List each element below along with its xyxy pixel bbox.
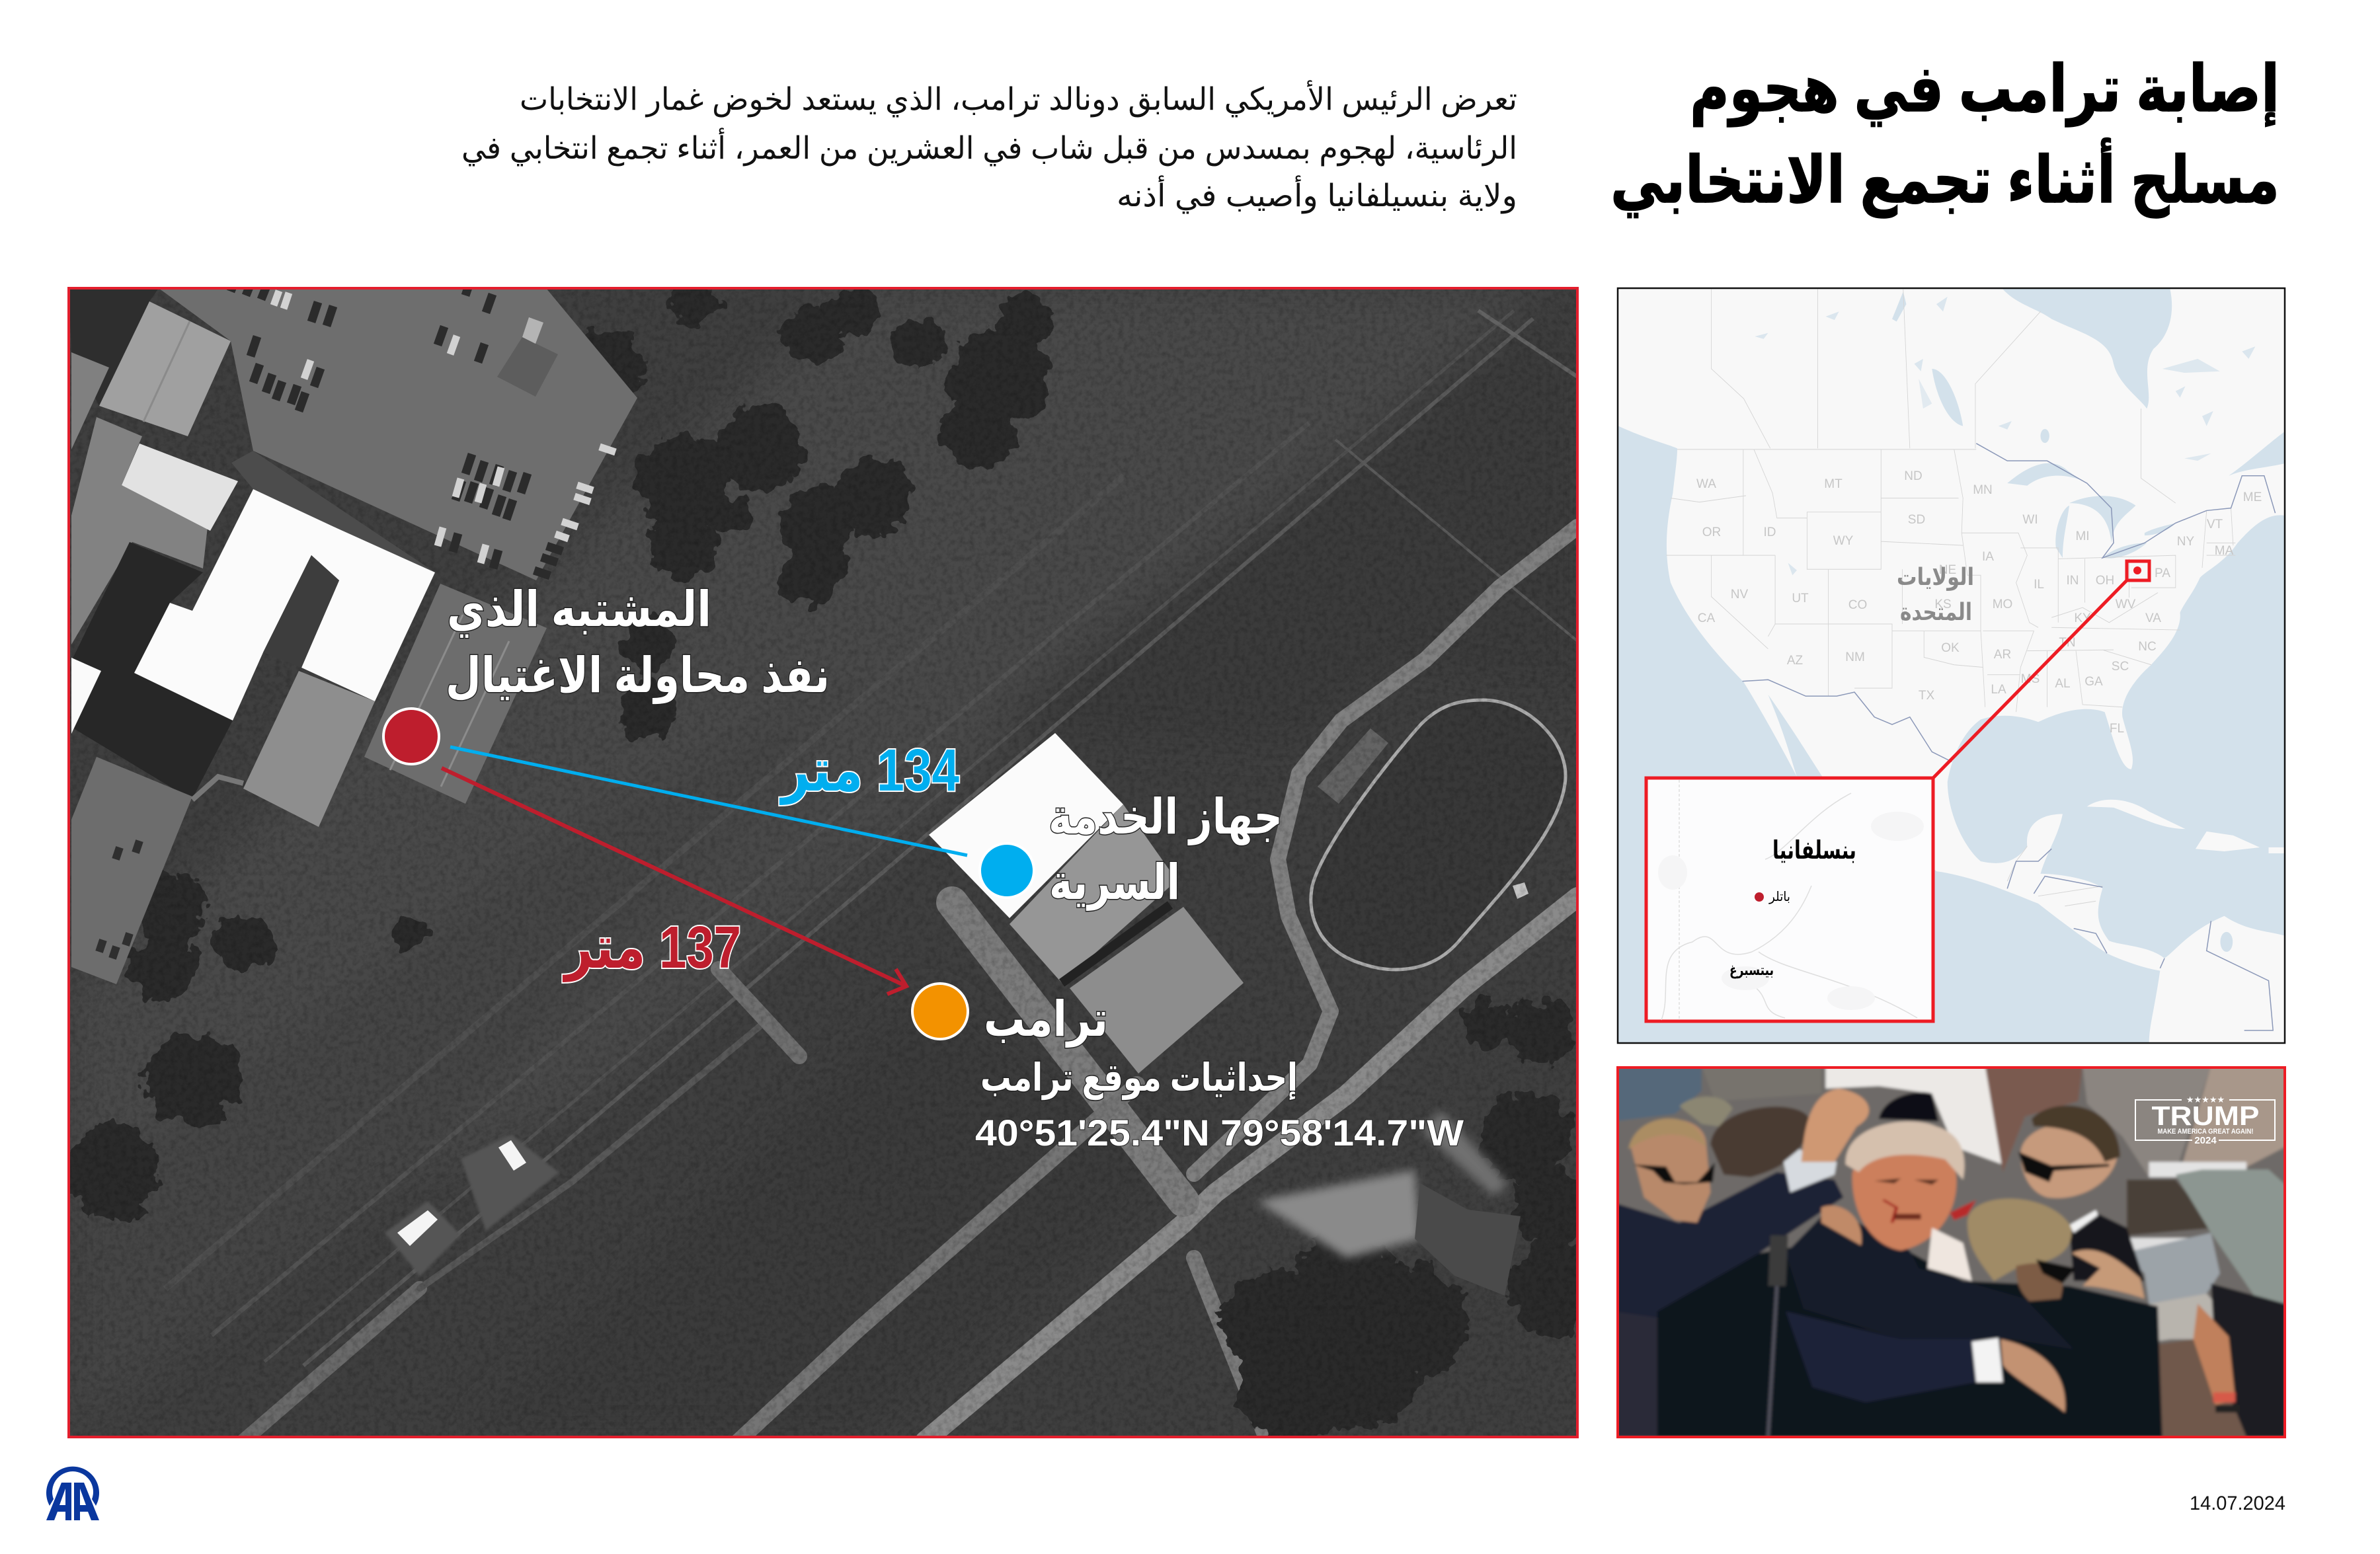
title: إصابة ترامب في هجوم (1690, 52, 2280, 128)
US state labels: AZ (1787, 654, 1804, 668)
label: secret service: جهاز الخدمة (1049, 789, 1283, 846)
US state labels: UT (1792, 592, 1809, 605)
US state labels: MN (1973, 483, 1993, 497)
US state labels (1696, 469, 2262, 736)
date: 14.07.2024 (2190, 1493, 2285, 1514)
label: 137 m: 137 متر (563, 915, 741, 982)
country label: United States (1897, 563, 1974, 625)
US state labels: MT (1824, 477, 1843, 491)
event hangars (929, 733, 1244, 1073)
trees (64, 273, 1600, 1441)
campaign logo (2135, 1095, 2275, 1146)
inset leader line (1933, 580, 2127, 778)
US state labels: KS (1934, 598, 1952, 611)
US state labels: OH (2096, 574, 2114, 588)
southern compound (385, 1110, 1521, 1296)
label: Trump position coordinates: 40°51'25.4"N 79°58'14.7"W (975, 1112, 1464, 1153)
US state labels: PA (2155, 566, 2170, 580)
hand on back (2001, 1339, 2065, 1413)
US state labels: OK (1941, 641, 1960, 655)
oval track (1311, 700, 1566, 970)
intro paragraph: الرئاسية، لهجوم بمسدس من قبل شاب في العشرين من العمر، أثناء تجمع انتخابي في (461, 128, 1517, 167)
campaign logo: 2024 (2194, 1135, 2217, 1146)
US state labels: NY (2177, 535, 2195, 549)
lakes and water (1755, 291, 2255, 952)
US state labels: KY (2074, 611, 2091, 625)
panel: locator map (1613, 284, 2285, 1045)
country label: United States: المتحدة (1900, 598, 1972, 625)
international borders (1743, 444, 2276, 1030)
US state labels: MI (2075, 529, 2090, 543)
label: 134 m: 134 متر (779, 738, 959, 805)
US state labels: NM (1845, 650, 1865, 664)
marker: suspect (383, 709, 439, 764)
crowd background (1613, 1066, 2285, 1437)
school building complex (69, 288, 547, 984)
US state labels: MO (1993, 598, 2012, 611)
US state labels: GA (2084, 675, 2103, 689)
small building by lot (497, 317, 558, 397)
US state labels: MA (2215, 544, 2234, 558)
right agent (2018, 1106, 2120, 1233)
country label: United States: الولايات (1897, 563, 1974, 591)
city label: Butler: باتلر (1768, 890, 1790, 904)
red scarf (1950, 1200, 1976, 1220)
campaign logo: TRUMP (2151, 1101, 2260, 1131)
label: secret service: السرية (1049, 855, 1180, 911)
label: suspect (446, 582, 830, 705)
US state labels: NC (2138, 640, 2157, 654)
panel: aerial view of rally site (64, 273, 1600, 1441)
US state labels: VT (2207, 518, 2223, 531)
distance line: 134 m (450, 747, 967, 855)
state and province borders (1666, 290, 2235, 906)
title (1610, 52, 2280, 218)
US state labels: WI (2022, 513, 2038, 527)
US state labels: WY (1833, 534, 1854, 548)
hand on shoulder (1821, 1206, 1862, 1245)
US state labels: LA (1991, 683, 2006, 697)
field tracks (165, 311, 1577, 1366)
US state labels: CA (1698, 611, 1716, 625)
US state labels: SD (1908, 513, 1925, 527)
Trump's face and hair (1846, 1122, 1964, 1251)
locator box (2127, 561, 2149, 580)
intro paragraph: ولاية بنسيلفانيا وأصيب في أذنه (1117, 175, 1517, 214)
US state labels: CO (1848, 598, 1867, 612)
roads (243, 527, 1577, 1441)
left agent (1628, 1118, 1715, 1223)
label: suspect: المشتبه الذي (447, 582, 711, 638)
city label: Pittsburgh: بيتسبرغ (1729, 962, 1774, 979)
US state labels: NV (1731, 588, 1749, 602)
label: Trump position coordinates: إحداثيات موقع ترامب (980, 1056, 1298, 1101)
US state labels: WV (2116, 598, 2136, 611)
panel: rally photo (1613, 1066, 2286, 1440)
bystander arm (2194, 1303, 2240, 1413)
collar (1928, 1227, 1972, 1281)
track-side structures (1318, 728, 1528, 899)
marker: Trump (912, 984, 968, 1039)
dark suits (1613, 1172, 2285, 1437)
US state labels: AR (1994, 648, 2011, 662)
US state labels: ME (2243, 490, 2262, 504)
inset: Pennsylvania detail (1646, 778, 1933, 1021)
microphone stand (1768, 1235, 1779, 1437)
shirt sleeve (1784, 1149, 1837, 1192)
label: suspect: نفذ محاولة الاغتيال (446, 648, 830, 705)
intro paragraph: تعرض الرئيس الأمريكي السابق دونالد ترامب، الذي يستعد لخوض غمار الانتخابات (520, 79, 1517, 118)
US state labels: IN (2067, 574, 2079, 588)
teleprompter (2176, 1169, 2285, 1303)
label: Trump position coordinates (975, 1056, 1464, 1153)
arrow: 137 m to Trump (442, 768, 906, 994)
label: Trump: ترامب (984, 991, 1108, 1048)
islands (2087, 800, 2285, 853)
US state labels: AL (2055, 677, 2071, 691)
label: secret service (1049, 789, 1283, 911)
US state labels: ID (1764, 525, 1776, 539)
US state labels: TN (2059, 636, 2076, 650)
US state labels: ND (1904, 469, 1923, 483)
state label: Pennsylvania: بنسلفانيا (1772, 837, 1856, 865)
US state labels: IA (1982, 550, 1994, 564)
campaign logo: ★★★★★ (2186, 1095, 2225, 1105)
land (1613, 284, 2285, 1045)
marker: Butler (1755, 892, 1764, 902)
cap (1679, 1092, 1938, 1126)
US state labels: FL (2110, 722, 2124, 736)
US state labels: TX (1919, 689, 1934, 703)
US state labels: OR (1702, 525, 1721, 539)
shirt cuff (1972, 1338, 2003, 1382)
intro paragraph (461, 79, 1517, 214)
agent head, back view (1710, 1107, 1810, 1177)
US state labels: VA (2145, 611, 2161, 625)
marker: secret service (980, 843, 1034, 898)
US state labels: NE (1939, 563, 1956, 577)
campaign logo: MAKE AMERICA GREAT AGAIN! (2158, 1128, 2253, 1136)
field bands (81, 304, 1478, 1137)
logo: Anadolu Agency (46, 1467, 99, 1520)
US state labels: IL (2034, 578, 2044, 592)
US state labels: WA (1696, 477, 1716, 491)
US state labels: MS (2021, 672, 2040, 686)
grain texture (69, 288, 1577, 1437)
US state labels: SC (2112, 660, 2129, 674)
parking lot (161, 290, 637, 580)
fist (1802, 1089, 1869, 1162)
female agent (1967, 1198, 2145, 1301)
